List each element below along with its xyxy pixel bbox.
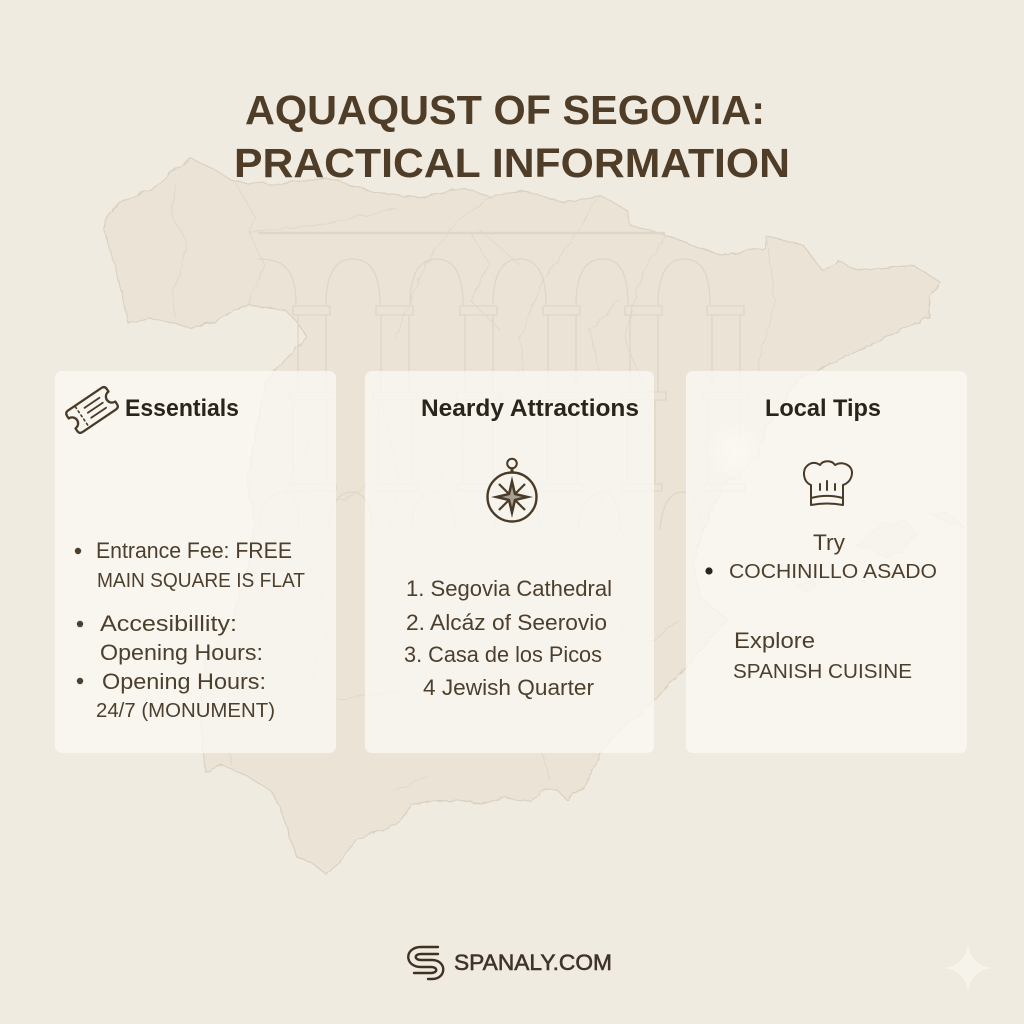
panel: essentials (55, 371, 336, 753)
heading: nearby attractions: Neardy Attractions (421, 395, 639, 422)
tips text: Explore (734, 628, 815, 653)
essentials list (75, 538, 305, 722)
attractions list: 2. Alcáz of Seerovio (406, 610, 607, 635)
attractions list: 3. Casa de los Picos (404, 642, 602, 667)
icon: ticket (65, 386, 119, 434)
title (234, 87, 790, 186)
essentials card (55, 371, 336, 753)
tips card (686, 371, 967, 753)
aqueduct watermark (258, 233, 748, 530)
heading: essentials: Essentials (125, 395, 239, 422)
map of Spain with aqueduct watermark (104, 158, 965, 875)
heading: local tips: Local Tips (765, 395, 881, 422)
title: AQUAQUST OF SEGOVIA: (245, 87, 765, 133)
essentials list: Entrance Fee: FREE (96, 538, 292, 563)
essentials list: Opening Hours: (102, 669, 266, 694)
icon: chef hat (804, 461, 852, 505)
icon: compass (488, 459, 536, 522)
icon: spanaly logo (408, 947, 443, 979)
panel: nearby attractions (365, 371, 654, 753)
essentials list: Accesibillity: (100, 611, 237, 636)
footer logo (408, 947, 612, 979)
essentials list: 24/7 (MONUMENT) (96, 699, 275, 722)
attractions list (404, 576, 612, 700)
map: mainland outline (104, 158, 940, 875)
map highlight glow (707, 420, 763, 484)
map: region borders (172, 182, 775, 790)
icon: sparkle (944, 944, 992, 992)
brand name: SPANALY.COM (454, 950, 612, 975)
panel: local tips (686, 371, 967, 753)
essentials list: Opening Hours: (100, 640, 263, 665)
tips text (705, 530, 937, 683)
attractions card (365, 371, 654, 753)
tips text: Try (813, 530, 845, 555)
tips text: COCHINILLO ASADO (729, 560, 937, 583)
tips text: SPANISH CUISINE (733, 660, 912, 683)
map: balearic islands (797, 512, 965, 592)
essentials list: MAIN SQUARE IS FLAT (97, 569, 305, 592)
attractions list: 1. Segovia Cathedral (406, 576, 612, 601)
title: PRACTICAL INFORMATION (234, 140, 790, 186)
attractions list: 4 Jewish Quarter (423, 675, 594, 700)
